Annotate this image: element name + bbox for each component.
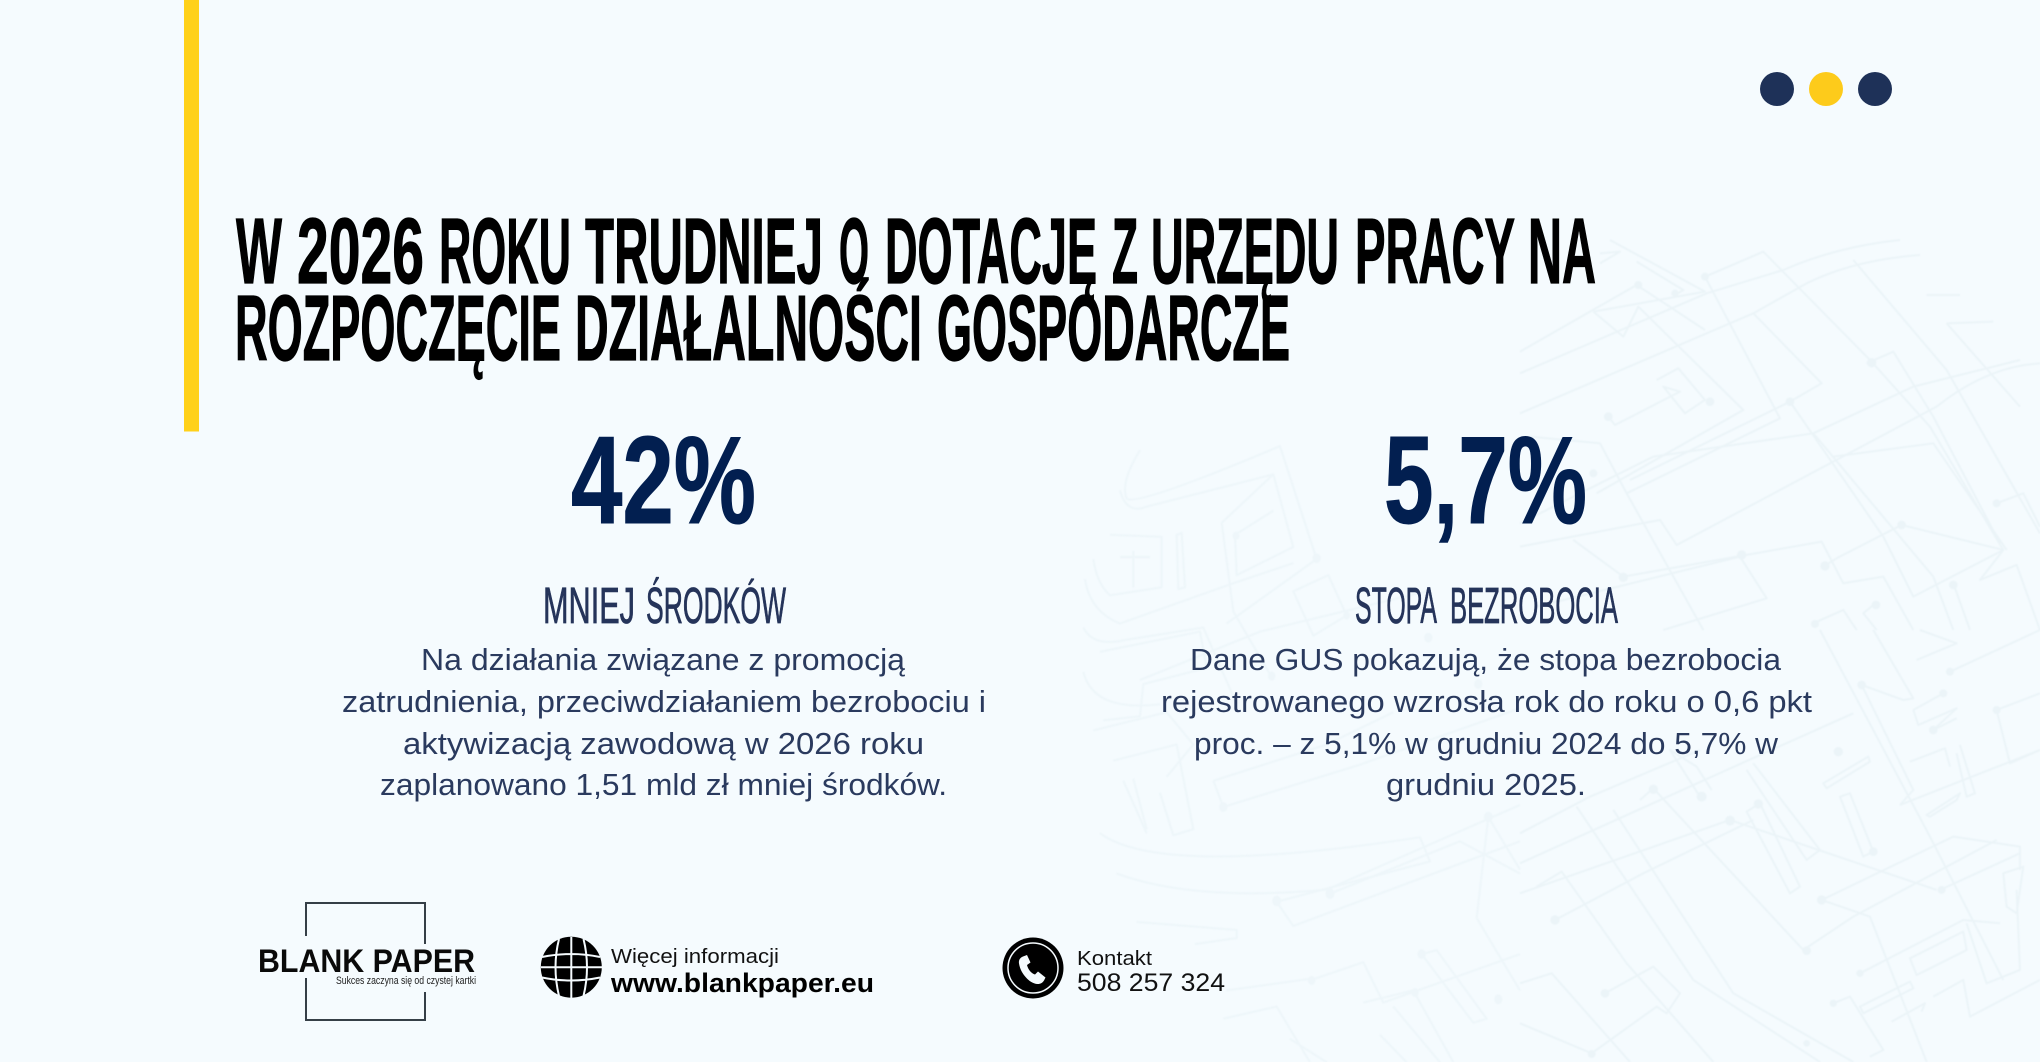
logo: blank paper: BLANK PAPER [258,943,475,979]
decorative dots [1760,72,1892,106]
title: Z [1112,199,1138,303]
panel: stopa bezrobocia [1161,412,1812,802]
heading: stopa bezrobocia [1355,577,1618,634]
heading: mniej środków [543,576,786,634]
contact: website: Więcej informacji [611,946,779,968]
title: TRUDNIEJ [585,199,823,303]
logo: blank paper [258,903,476,1020]
heading: stopa bezrobocia: STOPA [1355,577,1437,634]
text block: środki: zaplanowano 1,51 mld zł mniej środków. [380,767,947,802]
text block: dane GUS: proc. – z 5,1% w grudniu 2024 do 5,7% w [1194,726,1779,761]
title: ROZPOCZĘCIE [235,276,561,380]
title: NA [1528,199,1596,303]
contact: website [610,946,874,998]
title: PRACY [1355,199,1515,303]
contact: website: www.blankpaper.eu [610,968,874,998]
text block: środki: Na działania związane z promocją [421,642,906,677]
title: DZIAŁALNOŚCI [575,276,922,380]
heading: mniej środków: MNIEJ [543,577,635,634]
icon: phone [1002,938,1064,998]
title: GOSPODARCZE [937,276,1290,380]
contact: phone: Kontakt [1077,948,1152,970]
background: circuit globe pattern [1083,240,2040,1062]
text block: dane GUS [1161,642,1812,802]
text block: środki [342,642,986,802]
heading: mniej środków: ŚRODKÓW [646,576,786,634]
panel: mniej środków [342,412,986,802]
text block: środki: zatrudnienia, przeciwdziałaniem bezrobociu i [342,684,986,719]
title: 2026 [297,199,424,303]
title: O [839,199,869,303]
stat: 42%: 42% [571,412,756,550]
accent bar [184,0,199,432]
text block: dane GUS: rejestrowanego wzrosła rok do roku o 0,6 pkt [1161,684,1812,719]
title: URZĘDU [1151,199,1339,303]
heading: stopa bezrobocia: BEZROBOCIA [1450,577,1618,634]
contact: phone: 508 257 324 [1077,969,1225,997]
title: ROKU [439,199,571,303]
text block: dane GUS: grudniu 2025. [1386,767,1586,802]
title [235,199,1596,380]
title: DOTACJĘ [885,199,1097,303]
contact: phone [1077,948,1225,997]
title: W [236,199,282,303]
icon: globe [541,937,602,998]
stat: 5,7%: 5,7% [1384,412,1587,550]
logo: blank paper: Sukces zaczyna się od czystej kartki [336,975,476,987]
text block: środki: aktywizacją zawodową w 2026 roku [403,726,924,761]
text block: dane GUS: Dane GUS pokazują, że stopa bezrobocia [1190,642,1782,677]
